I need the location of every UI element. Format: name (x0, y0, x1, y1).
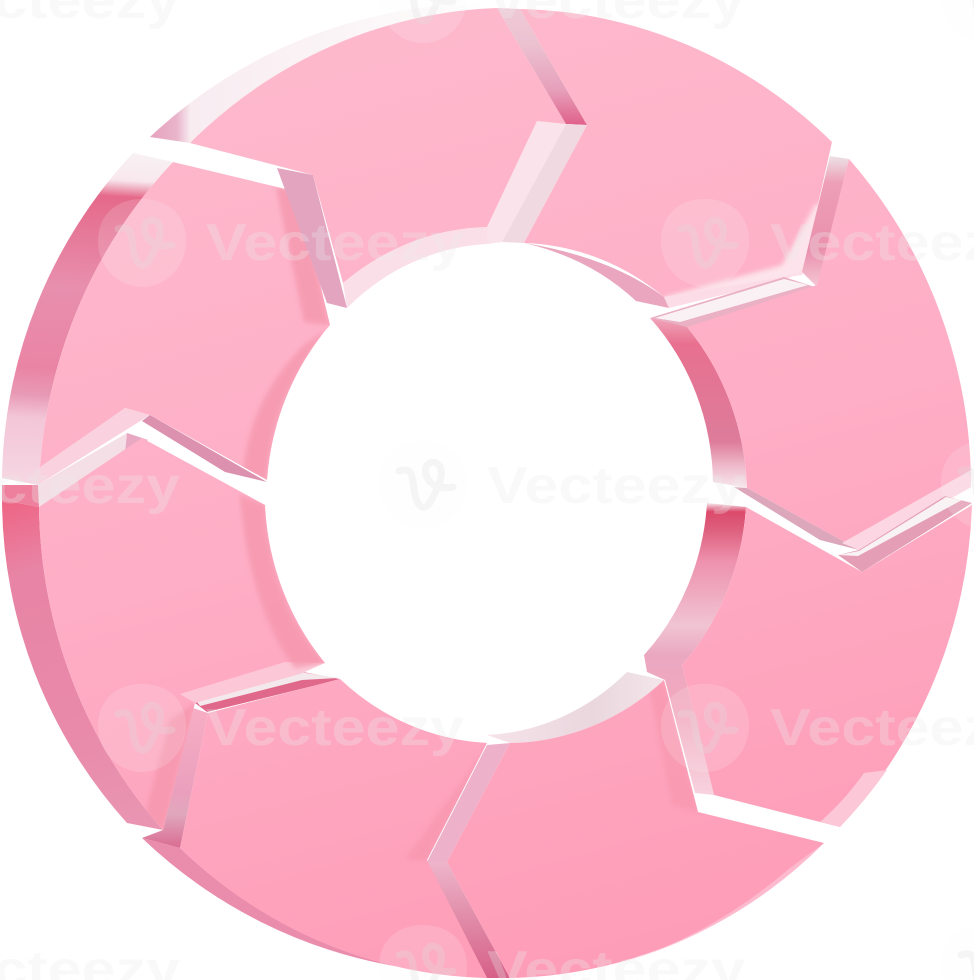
arrow segment: bottom right (427, 672, 824, 978)
watermark row 3: Vecteezy (487, 457, 745, 515)
glass edge: bottom right head lower (427, 862, 510, 978)
front face: right (687, 159, 971, 550)
watermark row 3 (0, 441, 974, 529)
inner shading: bottom right (650, 680, 698, 812)
glass edge: top left arrow tip white (487, 121, 566, 243)
light bevel: right tip (842, 470, 971, 550)
watermark row 4: Vecteezy (206, 699, 464, 757)
glass rim: top left (150, 4, 487, 143)
glass edge: lower left top corner (2, 485, 39, 507)
inner shading: bottom left (410, 762, 477, 858)
arrow segment: lower left (2, 433, 325, 830)
glass edge: top left side (277, 168, 347, 308)
glass edge: bottom left white stripe (197, 672, 338, 706)
front face: bottom right (447, 680, 824, 978)
glass edge: top right head upper (497, 8, 587, 125)
inner shading: lower left (145, 495, 325, 830)
glass edge: top right head lower (502, 124, 587, 243)
glass edge: lower left notch tip (125, 433, 148, 453)
light bevel: bottom right edge (600, 843, 824, 968)
glass edge: bottom right head upper (427, 743, 510, 862)
glass edge: right white stripe (655, 279, 808, 322)
front face: upper left (40, 162, 330, 480)
arrow segment: right (650, 156, 971, 550)
glass edge: lower right notch (838, 496, 972, 572)
watermark row 5 (0, 925, 974, 980)
glass edge: lower right inner (644, 503, 746, 795)
glass edge: right lower (734, 487, 859, 550)
watermark row 4 (98, 684, 974, 772)
glass edge: right side (802, 156, 849, 287)
arrow segment: lower right (644, 496, 972, 827)
light bevel: top right (664, 202, 818, 296)
glass rim: bottom left (142, 838, 400, 967)
light bevel: lower left tip (180, 662, 325, 703)
front face: top right (520, 9, 832, 297)
arrow segment: top left (150, 4, 566, 308)
glass edge: right inner (650, 318, 747, 488)
glass edge: right white band (650, 277, 815, 328)
glass rim: lower left (2, 500, 163, 830)
glass edge: bottom right white top (487, 672, 664, 743)
glass edge: upper left lower side (142, 415, 267, 482)
glass edge: lower left notch (38, 433, 148, 507)
arrow segment: upper left (2, 153, 330, 485)
glass rim: upper left (2, 153, 173, 485)
inner shading: upper left (243, 187, 330, 480)
arrow segment: bottom left (142, 672, 487, 978)
glass edge: upper left tip (38, 408, 150, 485)
glass edge: top left inner white (343, 227, 502, 308)
glass edge: lower right notch stripe (838, 497, 962, 556)
watermark row 1 (0, 0, 974, 43)
glass edge: top right inner (524, 243, 669, 308)
front face: bottom left (180, 679, 487, 978)
front face: lower right (682, 505, 972, 827)
glass edge: bottom left top band (195, 672, 340, 712)
light bevel: lower right edge (820, 770, 887, 827)
front face: lower left (39, 438, 325, 830)
front face: top left (190, 8, 566, 283)
arrow segment: top right (497, 8, 832, 308)
glass edge: bottom left side (142, 708, 208, 848)
watermark row 2: Vecteezy (206, 214, 464, 272)
light bevel: top right lower strip (664, 272, 802, 308)
watermark row 2 (98, 199, 974, 287)
